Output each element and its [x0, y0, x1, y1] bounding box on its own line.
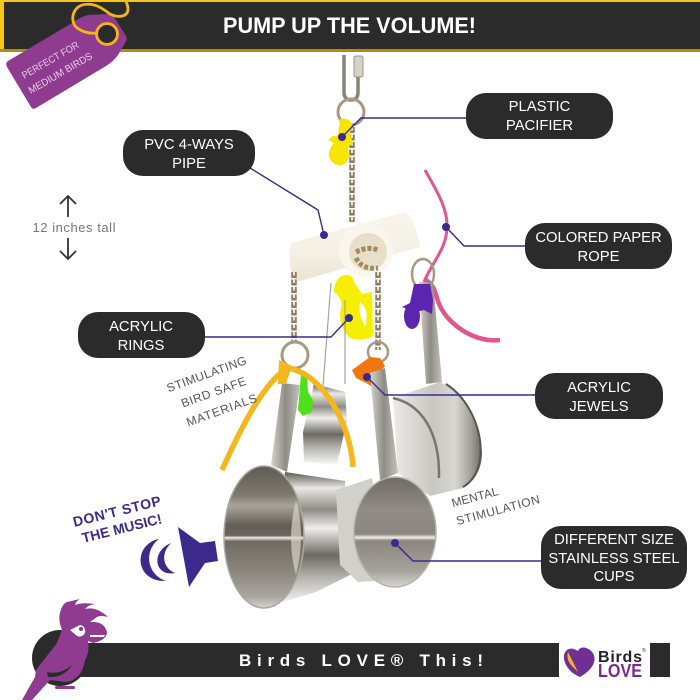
- logo: birds love: Birds: [598, 649, 642, 666]
- callout: plastic pacifier: [338, 93, 613, 141]
- title: PUMP UP THE VOLUME!: [223, 13, 476, 38]
- note: stimulating bird safe materials: STIMULATING: [165, 353, 248, 395]
- right chain: [375, 272, 381, 350]
- height label: 12 inches tall: [32, 220, 116, 235]
- large ring: [282, 342, 308, 368]
- medium cup body: [336, 478, 392, 582]
- toy: bird toy photo illustration: [222, 55, 500, 608]
- callout: colored paper rope: ROPE: [578, 249, 620, 265]
- callout: stainless steel cups: STAINLESS STEEL: [548, 551, 680, 567]
- logo: birds love: [564, 647, 646, 681]
- hanging clip: [344, 55, 363, 100]
- large cup rim: [224, 466, 304, 608]
- yellow pacifier: [328, 119, 353, 165]
- callout: plastic pacifier: PLASTIC: [509, 99, 571, 115]
- callout: colored paper rope: COLORED PAPER: [535, 230, 662, 246]
- medium handle: [370, 368, 398, 480]
- note: mental stimulation: MENTAL: [450, 484, 500, 510]
- callout: acrylic rings: [78, 312, 353, 358]
- green jewel: [298, 374, 313, 416]
- callout: stainless steel cups: CUPS: [593, 569, 635, 585]
- back cup handle: [419, 282, 442, 384]
- back cup: [393, 382, 482, 496]
- tag: perfect for medium birds: MEDIUM BIRDS: [27, 51, 95, 97]
- note: don't stop the music: DON'T STOP: [71, 492, 162, 530]
- orange jewel: [352, 357, 385, 390]
- icon: purple cockatoo: [22, 599, 108, 700]
- pink paper rope: [424, 170, 447, 282]
- header banner: [0, 0, 700, 52]
- yellow paper rope: [222, 368, 353, 470]
- purple pacifier and ring: [412, 259, 434, 289]
- yellow acrylic ring: [334, 275, 373, 340]
- note: don't stop the music: [71, 492, 164, 546]
- footer bar: [32, 630, 670, 686]
- callout: acrylic rings: RINGS: [118, 338, 165, 354]
- callout: acrylic rings: ACRYLIC: [109, 319, 173, 335]
- medium cup rim: [354, 477, 436, 587]
- left chain: [291, 272, 297, 342]
- small clear handle: [323, 283, 345, 386]
- footer text: Birds LOVE® This!: [239, 651, 483, 670]
- callout: plastic pacifier: PACIFIER: [506, 118, 573, 134]
- icon: speaker: [178, 527, 218, 587]
- logo: birds love: LOVE: [598, 661, 642, 681]
- note: stimulating bird safe materials: [165, 353, 259, 429]
- tag: perfect for medium birds: [6, 0, 128, 109]
- callout: colored paper rope: [442, 223, 672, 269]
- large handle: [271, 383, 300, 472]
- callout: stainless steel cups: DIFFERENT SIZE: [554, 532, 674, 548]
- icon: height arrows: [60, 196, 76, 259]
- callout: pvc pipe: PIPE: [172, 156, 206, 172]
- right ring: [368, 342, 388, 362]
- note: don't stop the music: THE MUSIC!: [80, 510, 164, 546]
- small cup: [303, 384, 347, 465]
- callout: pvc pipe: PVC 4-WAYS: [144, 137, 234, 153]
- large cup body: [270, 472, 352, 606]
- top ring: [338, 99, 364, 125]
- callout: acrylic jewels: ACRYLIC: [567, 380, 631, 396]
- callout: stainless steel cups: [391, 526, 687, 589]
- callout: acrylic jewels: JEWELS: [569, 399, 629, 415]
- top chain: [349, 127, 355, 222]
- tag: perfect for medium birds: PERFECT FOR: [20, 40, 81, 82]
- pipe: [289, 212, 420, 282]
- inner chain: [356, 248, 378, 268]
- icon: sound waves: [141, 539, 175, 581]
- note: mental stimulation: STIMULATION: [455, 492, 541, 528]
- logo: birds love: ®: [642, 647, 646, 654]
- note: stimulating bird safe materials: BIRD SAFE: [179, 374, 248, 410]
- callout: acrylic jewels: [363, 373, 663, 419]
- callout: pvc pipe: [123, 130, 328, 239]
- note: stimulating bird safe materials: MATERIALS: [184, 391, 259, 429]
- pipe socket: [339, 223, 393, 277]
